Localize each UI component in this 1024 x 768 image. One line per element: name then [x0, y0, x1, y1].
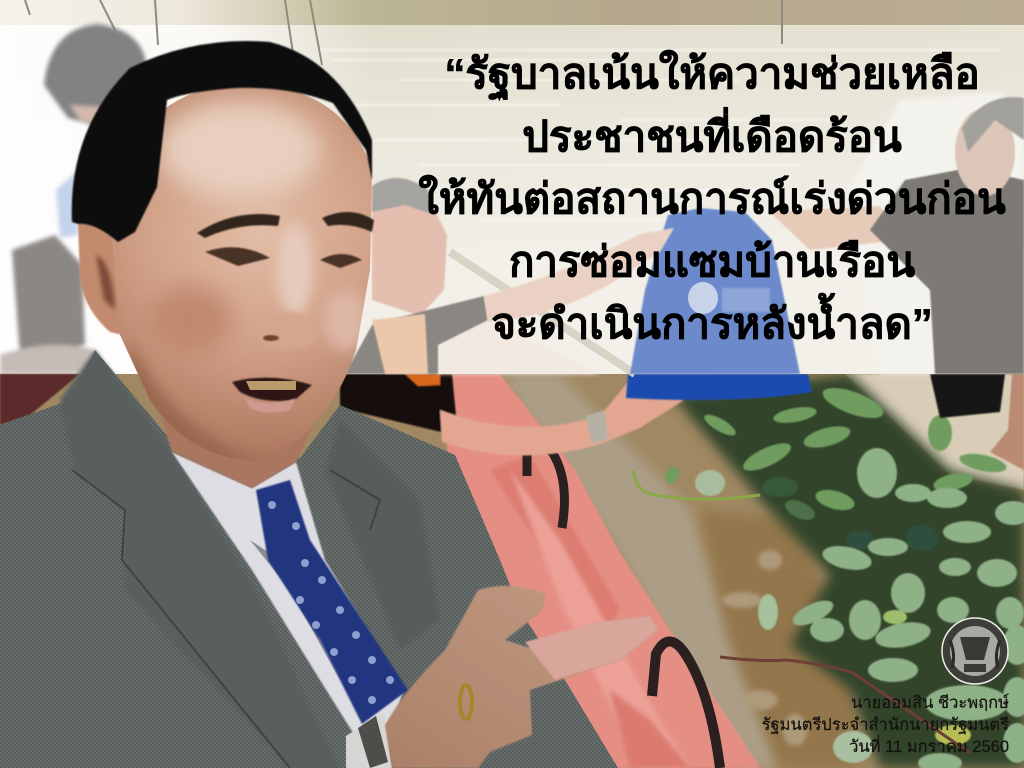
- face: [112, 86, 372, 461]
- quote line 1: “รัฐบาลเน้นให้ความช่วยเหลือ: [444, 50, 980, 97]
- left eyebrow: [197, 214, 280, 238]
- pink thumb: [525, 616, 658, 680]
- date: วันที่ 11 มกราคม 2560: [849, 738, 1009, 756]
- ripples on pale water: [300, 50, 1000, 220]
- blue patterned tie: [256, 480, 408, 724]
- blue bag: [630, 208, 800, 374]
- teeth: [246, 381, 296, 390]
- pale bamboo pole: [450, 252, 635, 374]
- pale dock: [438, 300, 600, 374]
- river water: [0, 374, 1024, 768]
- hair: [72, 41, 372, 242]
- right lapel: [325, 420, 440, 650]
- translucent quote panel base: [0, 25, 1024, 374]
- Secretariat seal emblem: [942, 618, 1008, 684]
- lapel seam: [72, 470, 380, 768]
- left eye: [205, 247, 270, 266]
- speaker name: นายออมสิน ชีวะพฤกษ์: [851, 694, 1009, 712]
- top river strip: [0, 0, 1024, 25]
- wristwatch: [358, 716, 388, 768]
- brightening gradient: [0, 25, 1024, 374]
- grey water near boat: [500, 374, 780, 768]
- faint poles: [25, 0, 782, 65]
- worker arm: [484, 228, 674, 322]
- right helper knees: [930, 374, 1005, 418]
- water light patches: [722, 550, 807, 746]
- worker's lower body and arm: [340, 374, 684, 456]
- right helper head: [955, 108, 1015, 196]
- speaker position: รัฐมนตรีประจำสำนักนายกรัฐมนตรี: [762, 716, 1009, 734]
- red boat hull: [438, 374, 760, 768]
- white shirt collar: [172, 452, 404, 768]
- quote line 5: จะดำเนินการหลังน้ำลด”: [491, 300, 933, 347]
- quote line 3: ให้ทันต่อสถานการณ์เร่งด่วนก่อน: [418, 175, 1006, 222]
- left lapel: [60, 350, 340, 768]
- mouth: [232, 378, 312, 401]
- right eye: [320, 254, 362, 268]
- brown water reflection: [700, 510, 860, 768]
- wooden deck at right: [845, 374, 1024, 490]
- green stem: [633, 470, 760, 499]
- neck shadow: [150, 380, 335, 488]
- right helper arm: [770, 206, 900, 250]
- nose: [258, 312, 318, 349]
- worker vest and shirt: [345, 296, 488, 374]
- right helper torso: [870, 168, 1024, 374]
- man: suit jacket: [0, 41, 658, 768]
- right eyebrow: [322, 212, 374, 232]
- lower lip: [244, 398, 296, 413]
- right helper arm: [990, 374, 1024, 470]
- faded boy at left: [0, 24, 146, 374]
- inner ear shadow: [96, 255, 115, 310]
- nostril: [263, 335, 279, 341]
- quote text block: [418, 50, 1006, 347]
- quote line 2: ประชาชนที่เดือดร้อน: [522, 113, 902, 160]
- blue relief bag lower part: [626, 374, 812, 400]
- boat railing handles: [527, 447, 564, 528]
- pale scene behind the quote: [345, 92, 1024, 374]
- worker head: [372, 200, 447, 316]
- pale boat on right: [848, 92, 1024, 374]
- shirt shadow: [250, 540, 340, 680]
- ear: [78, 222, 135, 338]
- brown branch: [720, 657, 970, 753]
- shirt cuff and watch: [346, 712, 392, 768]
- gesturing hand: [385, 586, 658, 768]
- gold ring: [460, 685, 472, 719]
- dark red fabric at left: [0, 374, 80, 425]
- quote line 4: การซ่อมแซมบ้านเรือน: [509, 238, 915, 285]
- speaker credit: [762, 694, 1009, 756]
- water plants: [633, 374, 1024, 768]
